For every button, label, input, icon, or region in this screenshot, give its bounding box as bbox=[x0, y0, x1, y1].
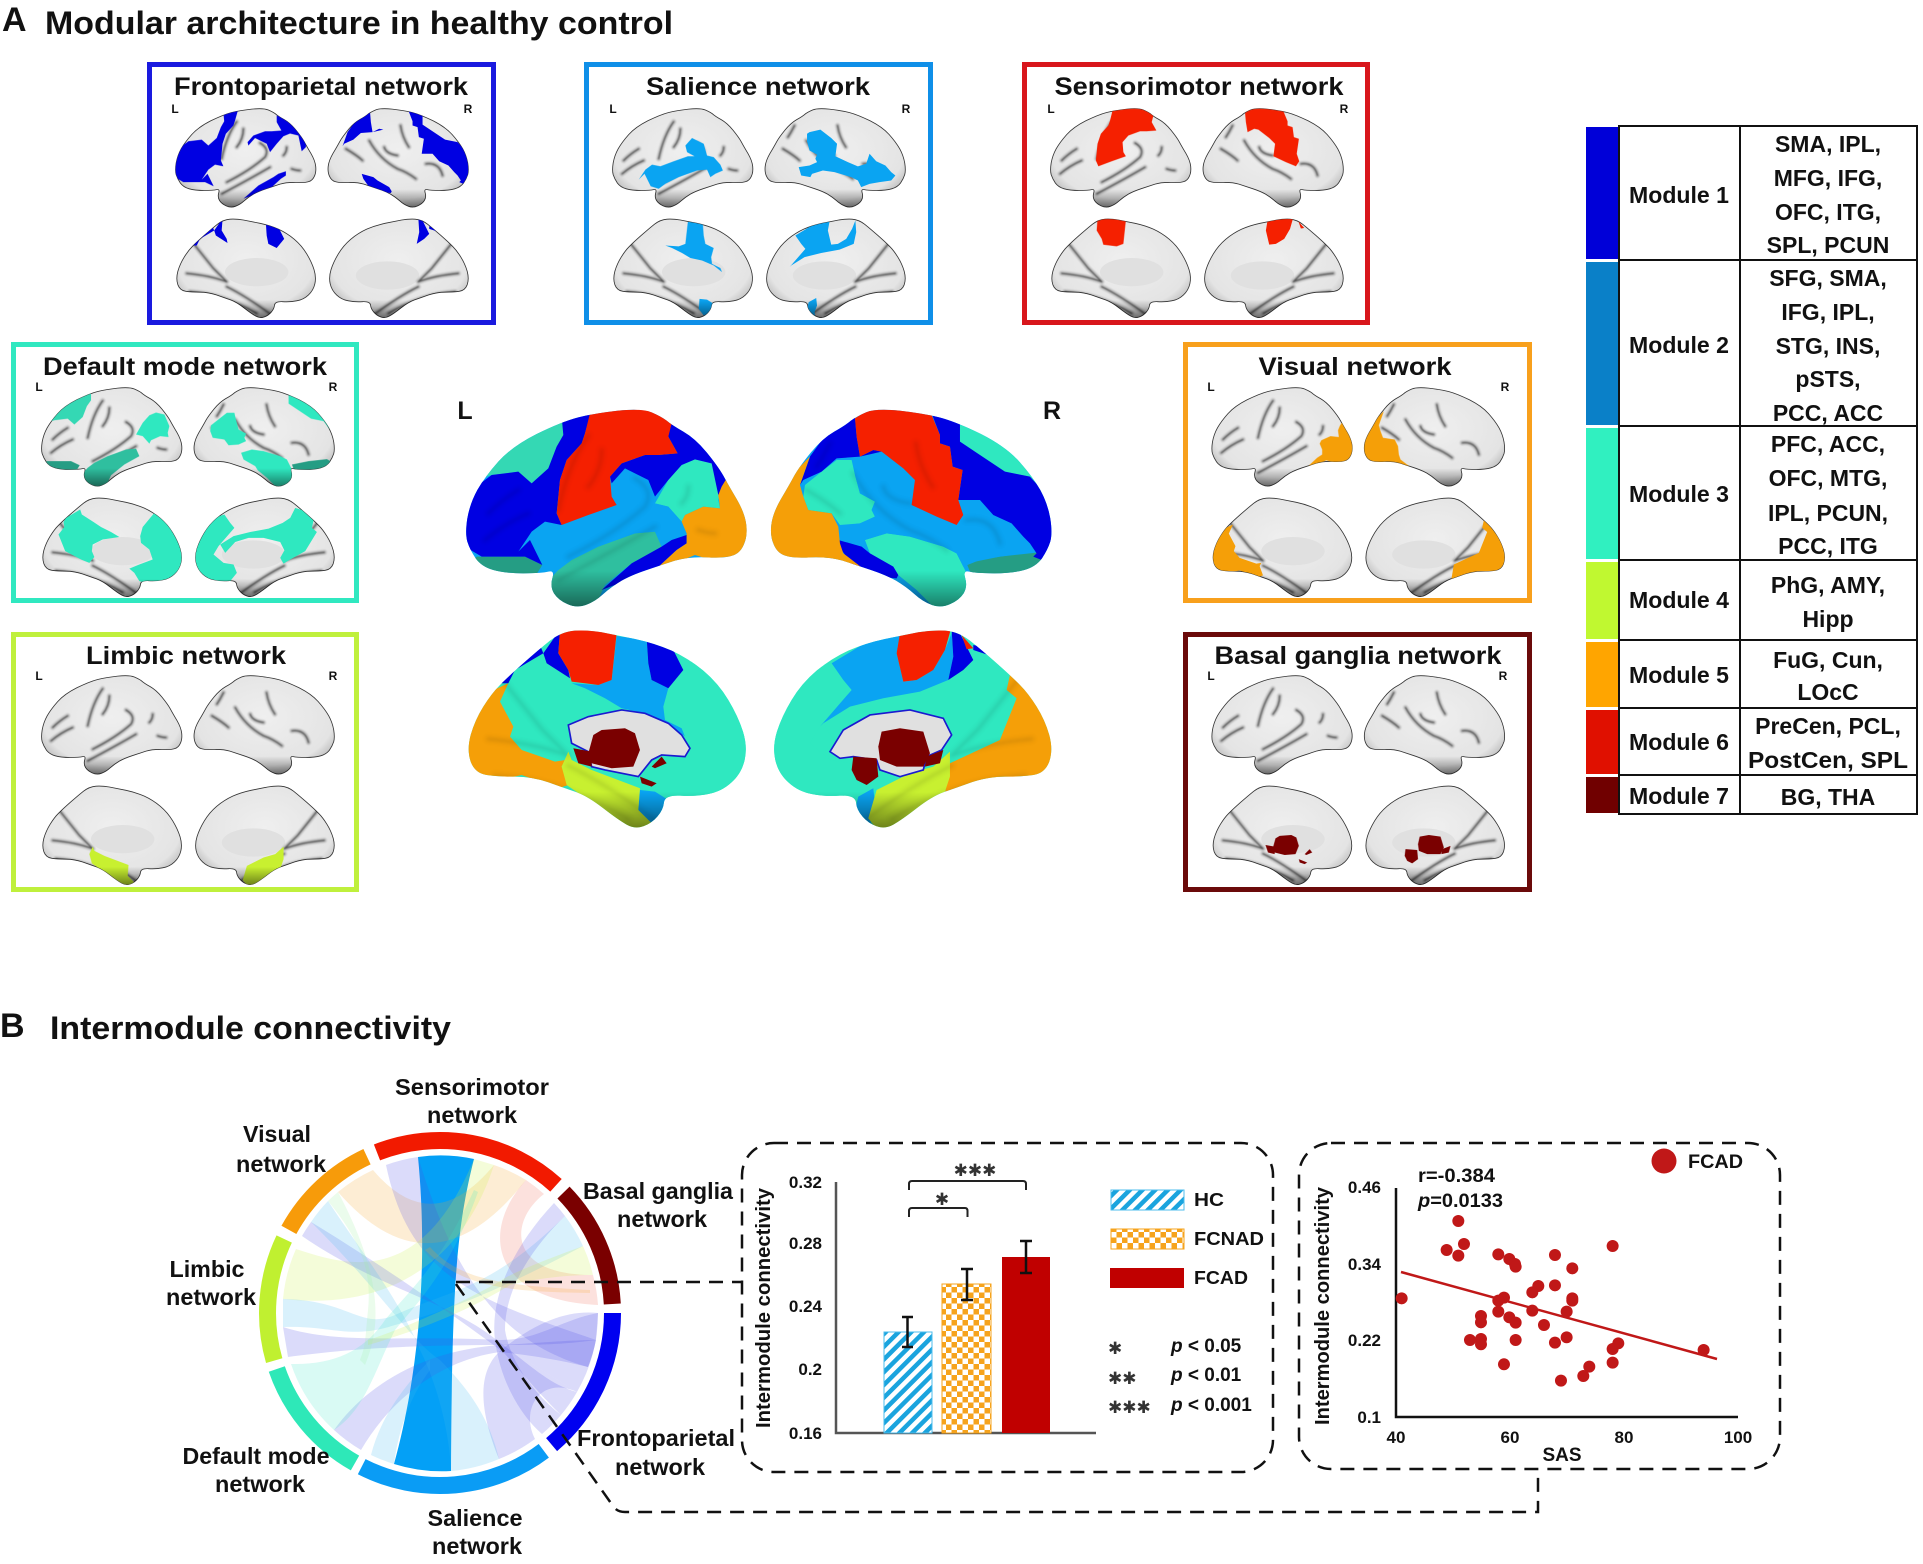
y axis title: Intermodule connectivity bbox=[753, 1187, 775, 1428]
significance stars bbox=[935, 1161, 996, 1210]
p value key bbox=[1108, 1336, 1252, 1418]
network labels: network bbox=[236, 1151, 326, 1177]
y tick labels: 0.28 bbox=[789, 1234, 822, 1253]
network labels: network bbox=[166, 1284, 256, 1310]
x tick labels: 80 bbox=[1615, 1428, 1633, 1447]
y tick labels bbox=[1348, 1178, 1382, 1427]
p value key: p < 0.05 bbox=[1170, 1336, 1242, 1357]
network labels: Frontoparietal bbox=[577, 1425, 735, 1451]
network labels: network bbox=[615, 1454, 705, 1480]
significance brackets bbox=[909, 1181, 1026, 1217]
y tick labels bbox=[789, 1173, 823, 1443]
data points bbox=[1396, 1215, 1710, 1387]
module names: Module 3 bbox=[1629, 481, 1729, 507]
p value key: ✱✱ bbox=[1108, 1369, 1136, 1389]
y tick labels: 0.24 bbox=[789, 1297, 823, 1316]
y tick labels: 0.22 bbox=[1348, 1331, 1381, 1350]
x axis title: SAS bbox=[1542, 1445, 1582, 1466]
significance stars: ✱✱✱ bbox=[954, 1161, 996, 1181]
panel: basal ganglia network: L bbox=[1207, 669, 1215, 683]
brain regions: OFC, ITG, bbox=[1775, 199, 1881, 225]
module names: Module 5 bbox=[1629, 662, 1729, 688]
p value key: ✱✱✱ bbox=[1108, 1398, 1151, 1418]
brain regions: PCC, ACC bbox=[1773, 400, 1883, 426]
table grid bbox=[1619, 126, 1917, 814]
y tick labels: 0.34 bbox=[1348, 1255, 1382, 1274]
module names: Module 1 bbox=[1629, 182, 1729, 208]
brain regions: Hipp bbox=[1802, 606, 1854, 632]
y tick labels: 0.32 bbox=[789, 1173, 822, 1192]
panel: frontoparietal network: L bbox=[171, 102, 179, 116]
x tick labels: 40 bbox=[1387, 1428, 1405, 1447]
network labels: Salience bbox=[428, 1505, 522, 1531]
brain regions: LOcC bbox=[1797, 679, 1859, 705]
panel: frontoparietal network bbox=[150, 64, 494, 322]
legend: FCAD bbox=[1688, 1152, 1743, 1173]
module names bbox=[1629, 182, 1729, 809]
brain regions: IPL, PCUN, bbox=[1768, 500, 1888, 526]
bars bbox=[884, 1257, 1050, 1433]
legend table: modules and regions bbox=[1586, 126, 1917, 814]
faded chords bbox=[283, 1157, 598, 1471]
panel: salience network bbox=[586, 64, 930, 322]
panel: salience network: L bbox=[609, 102, 617, 116]
brain regions: PostCen, SPL bbox=[1748, 747, 1908, 773]
heading: section A: Modular architecture in healthy control bbox=[45, 5, 673, 41]
brain regions: PFC, ACC, bbox=[1771, 431, 1885, 457]
central brain: all modules: L bbox=[457, 397, 473, 425]
legend: HC bbox=[1194, 1190, 1224, 1210]
panel: limbic network: L bbox=[35, 669, 43, 683]
regression line bbox=[1401, 1272, 1717, 1359]
heading: section B: B bbox=[0, 1007, 25, 1045]
brain regions: PreCen, PCL, bbox=[1755, 713, 1901, 739]
panel: basal ganglia network: R bbox=[1499, 669, 1508, 683]
panel: visual network: R bbox=[1501, 380, 1510, 394]
brain regions: IFG, IPL, bbox=[1781, 299, 1875, 325]
central brain: all modules bbox=[457, 397, 1061, 835]
panel: sensorimotor network: R bbox=[1340, 102, 1349, 116]
brain regions: STG, INS, bbox=[1776, 333, 1880, 359]
brain regions: pSTS, bbox=[1795, 366, 1861, 392]
y tick labels: 0.16 bbox=[789, 1424, 822, 1443]
panel: default mode network bbox=[14, 344, 356, 600]
statistics: r=-0.384 bbox=[1418, 1166, 1495, 1187]
statistics bbox=[1417, 1166, 1503, 1212]
brain regions: SMA, IPL, bbox=[1775, 131, 1881, 157]
network labels: network bbox=[432, 1533, 522, 1559]
central brain: all modules: R bbox=[1043, 397, 1061, 425]
panel: sensorimotor network: Sensorimotor network bbox=[1054, 73, 1344, 101]
panel: default mode network: R bbox=[329, 380, 338, 394]
network labels: Default mode bbox=[182, 1443, 330, 1469]
p value key: ✱ bbox=[1108, 1339, 1122, 1359]
module names: Module 2 bbox=[1629, 332, 1729, 358]
panel: limbic network: R bbox=[329, 669, 338, 683]
brain regions: FuG, Cun, bbox=[1773, 647, 1883, 673]
dashed callout connectors bbox=[456, 1282, 1538, 1512]
brain regions: BG, THA bbox=[1781, 784, 1875, 810]
panel: frontoparietal network: R bbox=[464, 102, 473, 116]
panel: visual network: L bbox=[1207, 380, 1215, 394]
statistics: p=0.0133 bbox=[1417, 1191, 1503, 1212]
module names: Module 7 bbox=[1629, 783, 1729, 809]
brain regions: OFC, MTG, bbox=[1769, 465, 1887, 491]
module names: Module 6 bbox=[1629, 729, 1729, 755]
panel: basal ganglia network: Basal ganglia network bbox=[1214, 642, 1502, 670]
outer ring: network sectors bbox=[268, 1140, 612, 1486]
network labels: Limbic bbox=[170, 1256, 245, 1282]
panel: basal ganglia network bbox=[1186, 634, 1530, 890]
network labels: Visual bbox=[243, 1121, 311, 1147]
significance stars: ✱ bbox=[935, 1190, 949, 1210]
x tick labels: 60 bbox=[1501, 1428, 1519, 1447]
x tick labels bbox=[1387, 1428, 1752, 1447]
y tick labels: 0.1 bbox=[1357, 1408, 1381, 1427]
chord diagram bbox=[166, 1074, 735, 1559]
module colour bar bbox=[1586, 127, 1619, 813]
y tick labels: 0.2 bbox=[798, 1360, 822, 1379]
legend bbox=[1652, 1148, 1743, 1174]
panel: visual network bbox=[1186, 344, 1530, 600]
panel: frontoparietal network: Frontoparietal network bbox=[174, 73, 468, 101]
brain regions: SPL, PCUN bbox=[1767, 232, 1889, 258]
network labels: network bbox=[617, 1206, 707, 1232]
callout: scatter plot bbox=[1299, 1143, 1780, 1469]
panel: salience network: Salience network bbox=[646, 73, 870, 101]
axes bbox=[836, 1182, 1096, 1433]
network labels: network bbox=[427, 1102, 517, 1128]
legend bbox=[1110, 1190, 1264, 1288]
network labels: Sensorimotor bbox=[395, 1074, 549, 1100]
p value key: p < 0.01 bbox=[1170, 1365, 1242, 1386]
panel: limbic network bbox=[14, 634, 356, 890]
axes bbox=[1396, 1188, 1738, 1417]
panel: sensorimotor network: L bbox=[1047, 102, 1055, 116]
panel: default mode network: L bbox=[35, 380, 43, 394]
brain regions bbox=[1748, 131, 1908, 810]
brain regions: SFG, SMA, bbox=[1769, 265, 1887, 291]
brain regions: MFG, IFG, bbox=[1774, 165, 1882, 191]
brain regions: PhG, AMY, bbox=[1771, 572, 1885, 598]
network labels bbox=[166, 1074, 735, 1559]
central salience to sensorimotor chord bbox=[394, 1155, 474, 1471]
network labels: Basal ganglia bbox=[583, 1178, 733, 1204]
y axis title: Intermodule connectivity bbox=[1312, 1186, 1334, 1425]
panel: visual network: Visual network bbox=[1258, 353, 1452, 381]
panel: default mode network: Default mode network bbox=[43, 353, 327, 381]
legend: FCAD bbox=[1194, 1268, 1248, 1288]
panel: sensorimotor network bbox=[1024, 64, 1368, 322]
panel: limbic network: Limbic network bbox=[86, 642, 286, 670]
y tick labels: 0.46 bbox=[1348, 1178, 1381, 1197]
legend: FCNAD bbox=[1194, 1229, 1264, 1249]
error bars bbox=[902, 1241, 1032, 1347]
module names: Module 4 bbox=[1629, 587, 1729, 613]
heading: section B: Intermodule connectivity bbox=[50, 1010, 451, 1046]
p value key: p < 0.001 bbox=[1170, 1395, 1252, 1416]
panel: salience network: R bbox=[902, 102, 911, 116]
network labels: network bbox=[215, 1471, 305, 1497]
heading: section A: A bbox=[2, 1, 27, 39]
x tick labels: 100 bbox=[1724, 1428, 1752, 1447]
callout: bar chart bbox=[742, 1143, 1273, 1472]
brain regions: PCC, ITG bbox=[1778, 533, 1878, 559]
